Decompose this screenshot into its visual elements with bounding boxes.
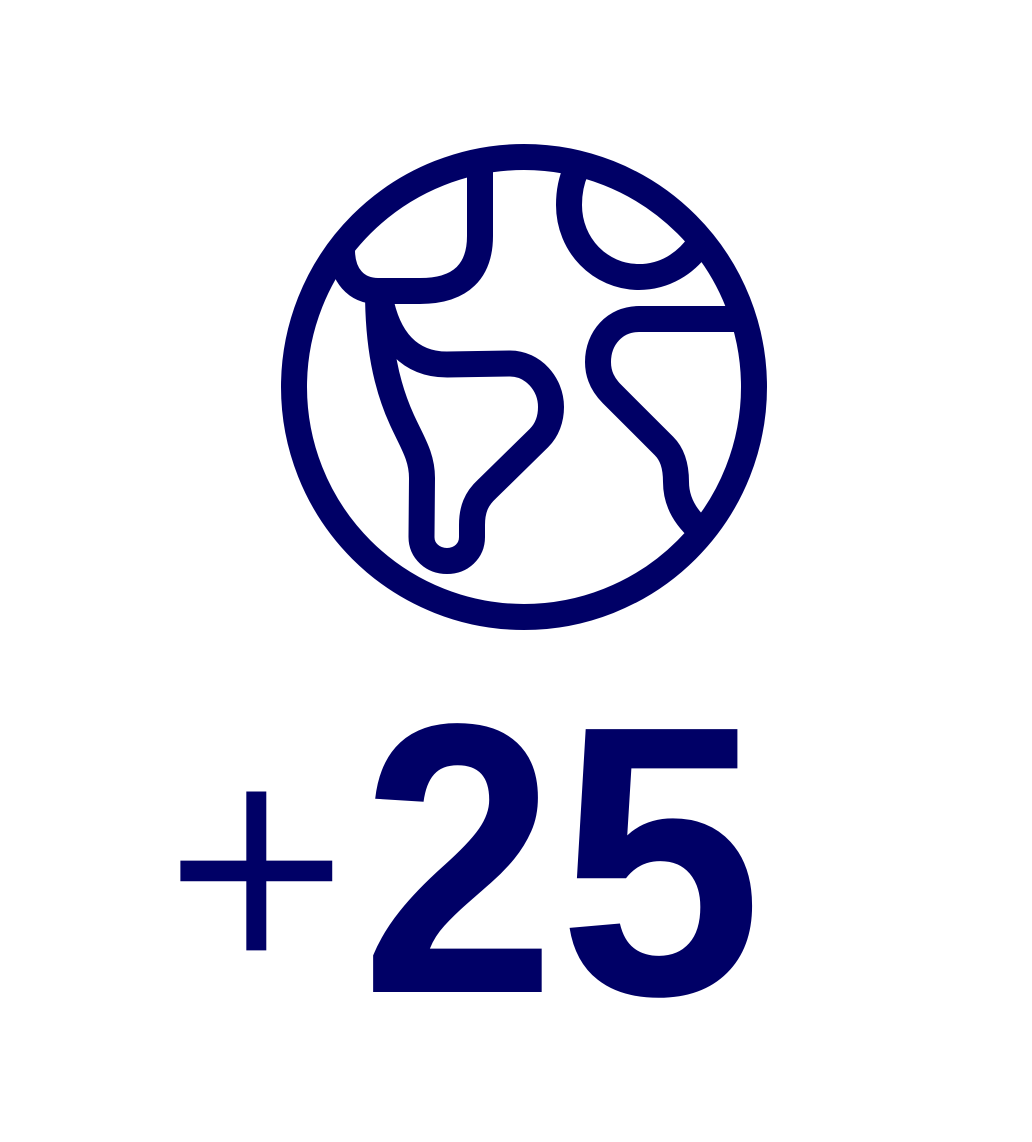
plus sign: + — [163, 682, 349, 1052]
icon: globe — [294, 157, 754, 617]
number: +25 — [163, 643, 762, 1076]
digits 25: 2 — [361, 643, 556, 1074]
digits 25: 5 — [558, 645, 762, 1076]
digits 25 — [361, 643, 762, 1076]
